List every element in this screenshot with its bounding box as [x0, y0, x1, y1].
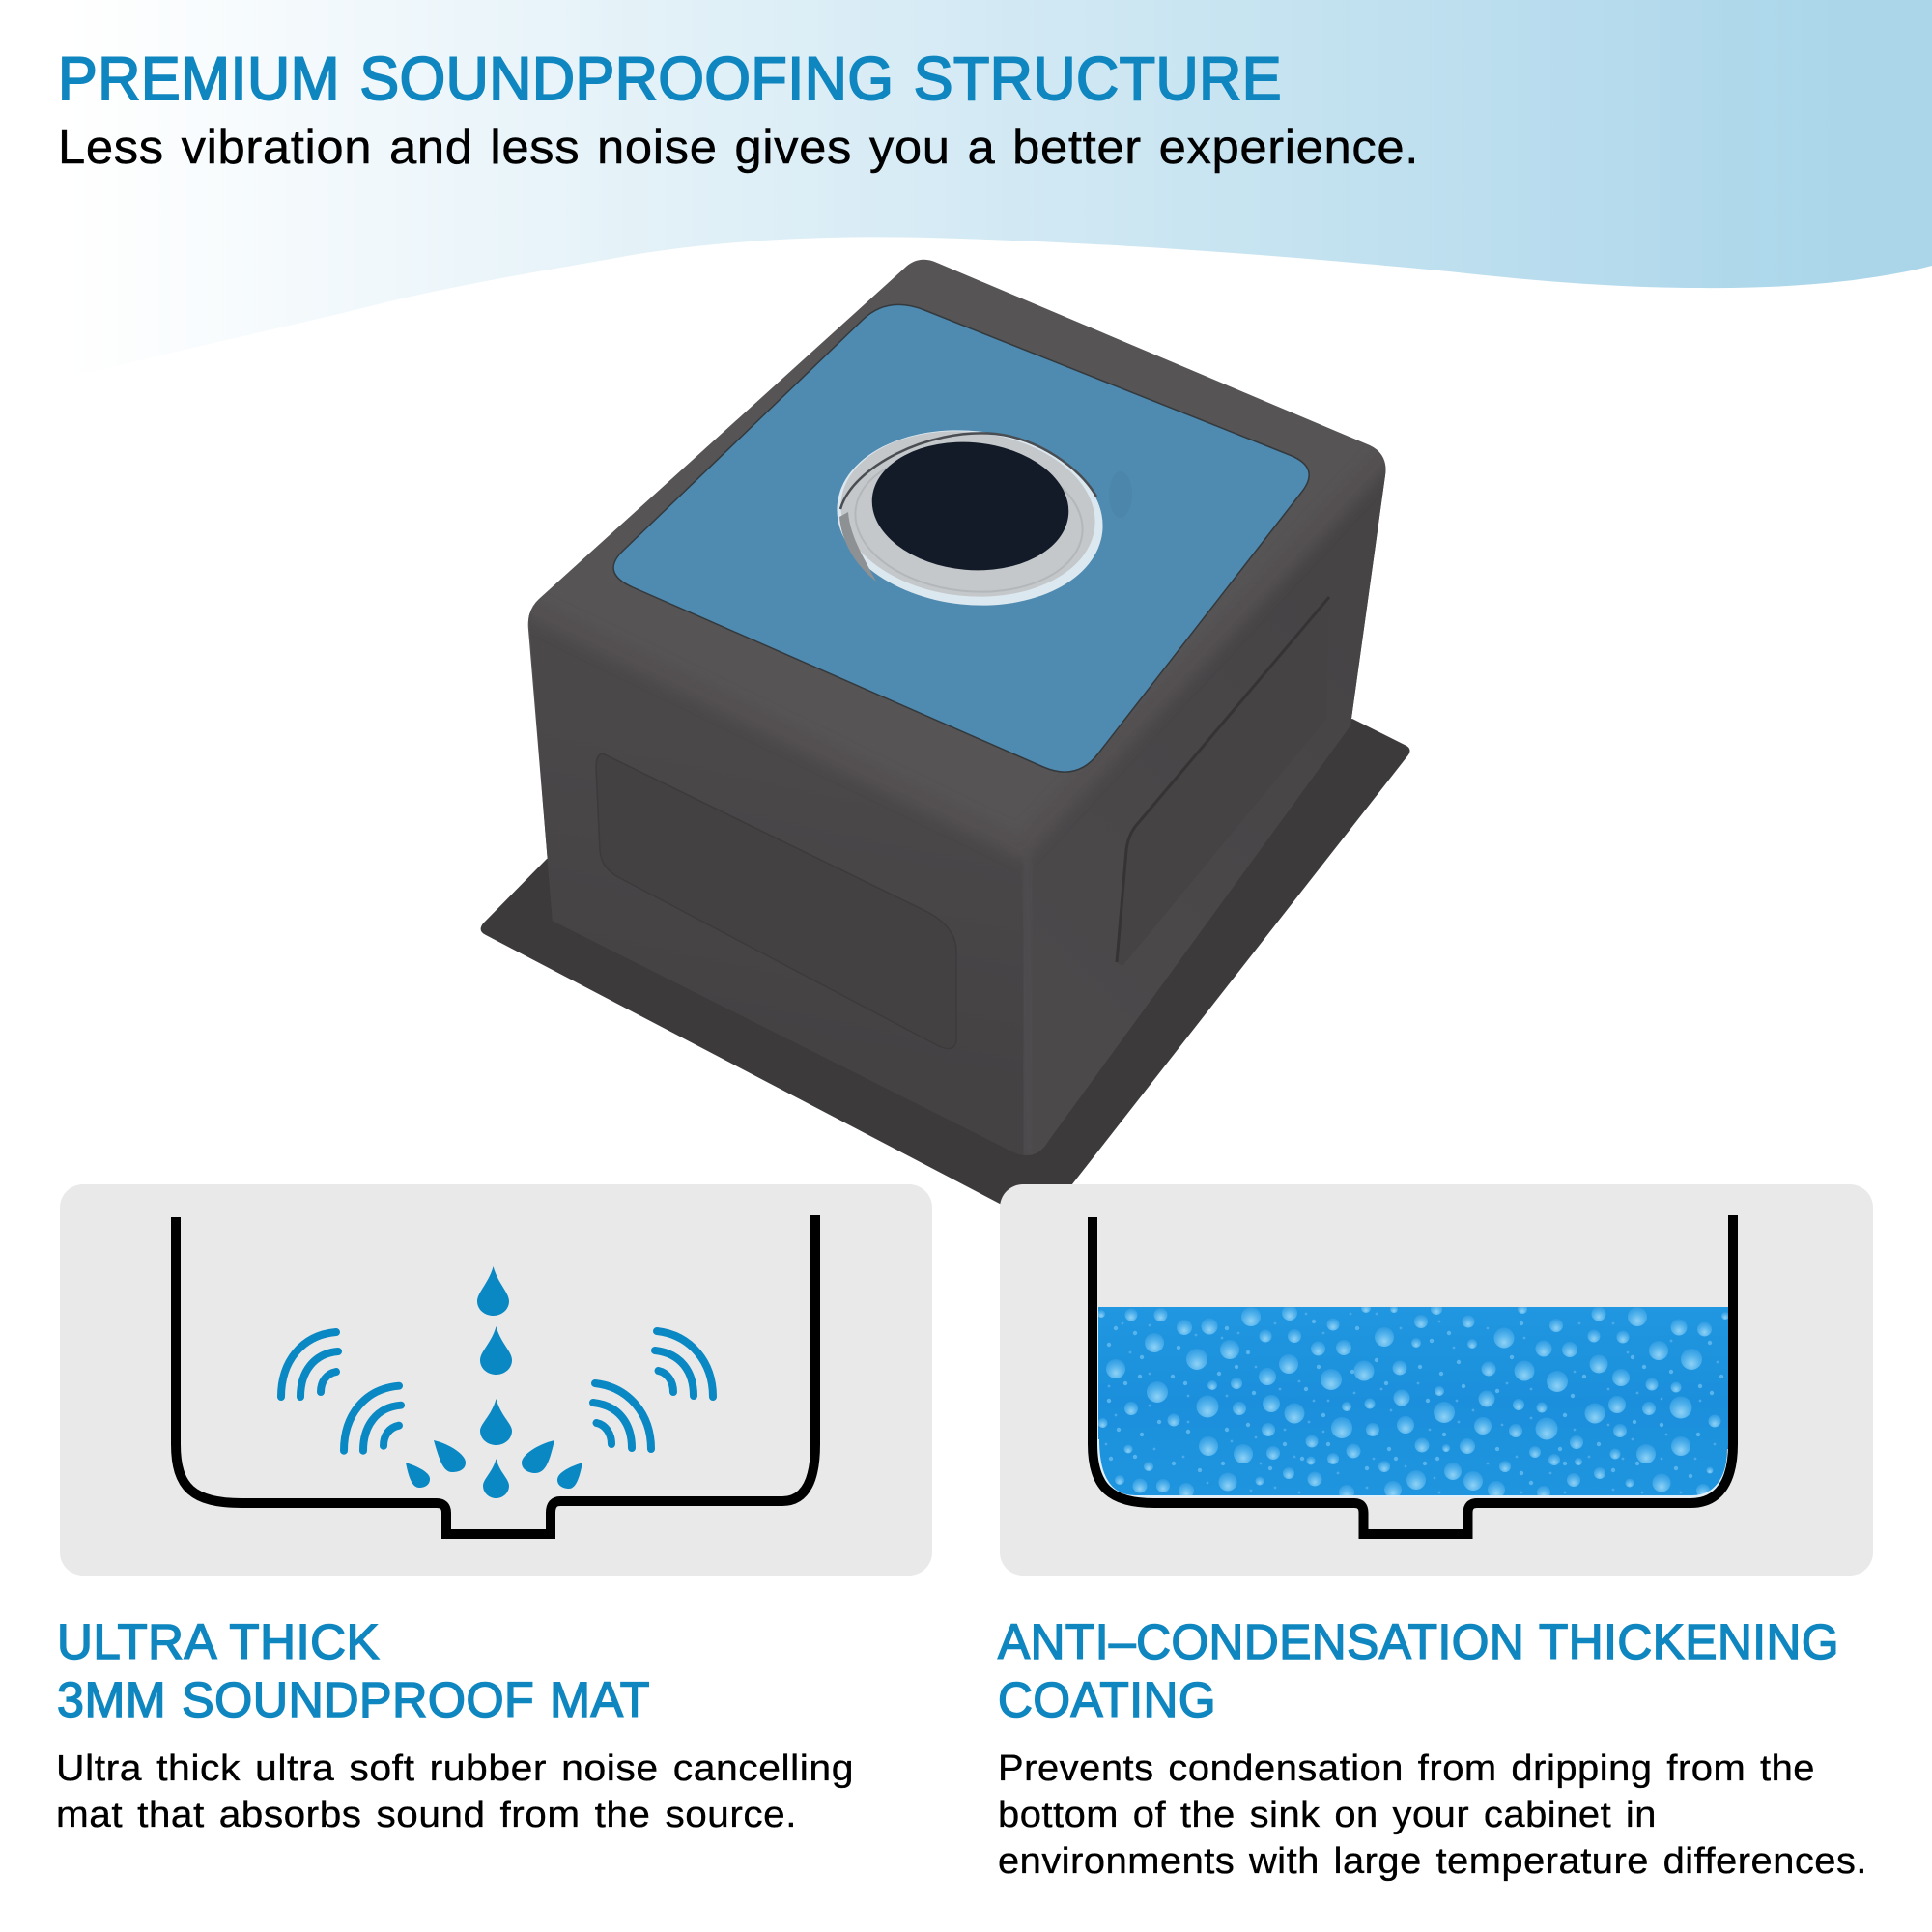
left text block — [56, 1614, 854, 1835]
icon: sound waves left upper — [281, 1332, 338, 1397]
blue soundproof pad — [613, 304, 1309, 772]
right side patch — [1117, 597, 1329, 966]
subtitle: Less vibration and less noise gives you a better experience. — [58, 122, 1419, 174]
title: PREMIUM SOUNDPROOFING STRUCTURE — [58, 45, 1282, 113]
heading: ultra thick mat: 3MM SOUNDPROOF MAT — [57, 1672, 650, 1727]
sink flange — [481, 719, 1410, 1225]
heading: anti-condensation coating: COATING — [998, 1672, 1216, 1727]
condensation water droplets fill — [1097, 1303, 1729, 1500]
right text block — [998, 1614, 1867, 1882]
icon: falling water drops — [406, 1266, 582, 1498]
tiny condensation beads — [1109, 1321, 1721, 1483]
product: sink underside with blue pad — [481, 242, 1410, 1225]
body text: mat — [56, 1748, 854, 1835]
body text: coating — [998, 1748, 1867, 1882]
icon: sound waves left lower — [344, 1386, 401, 1451]
heading: ultra thick mat — [57, 1614, 650, 1727]
sink outline left — [176, 1215, 815, 1534]
drain hole — [828, 417, 1132, 618]
sink body — [512, 242, 1410, 1169]
left side patch — [596, 754, 956, 1049]
icon: sound waves right upper — [655, 1331, 713, 1397]
body text: mat: Ultra thick ultra soft rubber noise cancelling — [56, 1748, 854, 1789]
heading: anti-condensation coating: ANTI–CONDENSATION THICKENING — [998, 1614, 1839, 1669]
icon: sound waves right lower — [593, 1383, 651, 1449]
panel: soundproof mat diagram — [60, 1184, 932, 1576]
heading: anti-condensation coating — [998, 1614, 1839, 1727]
body text: coating: Prevents condensation from dripping from the — [998, 1748, 1815, 1789]
header wave background — [0, 0, 1932, 401]
sink outline right — [1093, 1215, 1733, 1534]
body text: mat: mat that absorbs sound from the source. — [56, 1795, 797, 1835]
body text: coating: bottom of the sink on your cabinet in — [998, 1795, 1657, 1835]
body text: coating: environments with large temperature differences. — [998, 1841, 1867, 1882]
heading: ultra thick mat: ULTRA THICK — [57, 1614, 380, 1669]
panel: anti-condensation diagram — [1000, 1184, 1873, 1576]
sink outline right with pale inner edge — [1098, 1439, 1728, 1496]
